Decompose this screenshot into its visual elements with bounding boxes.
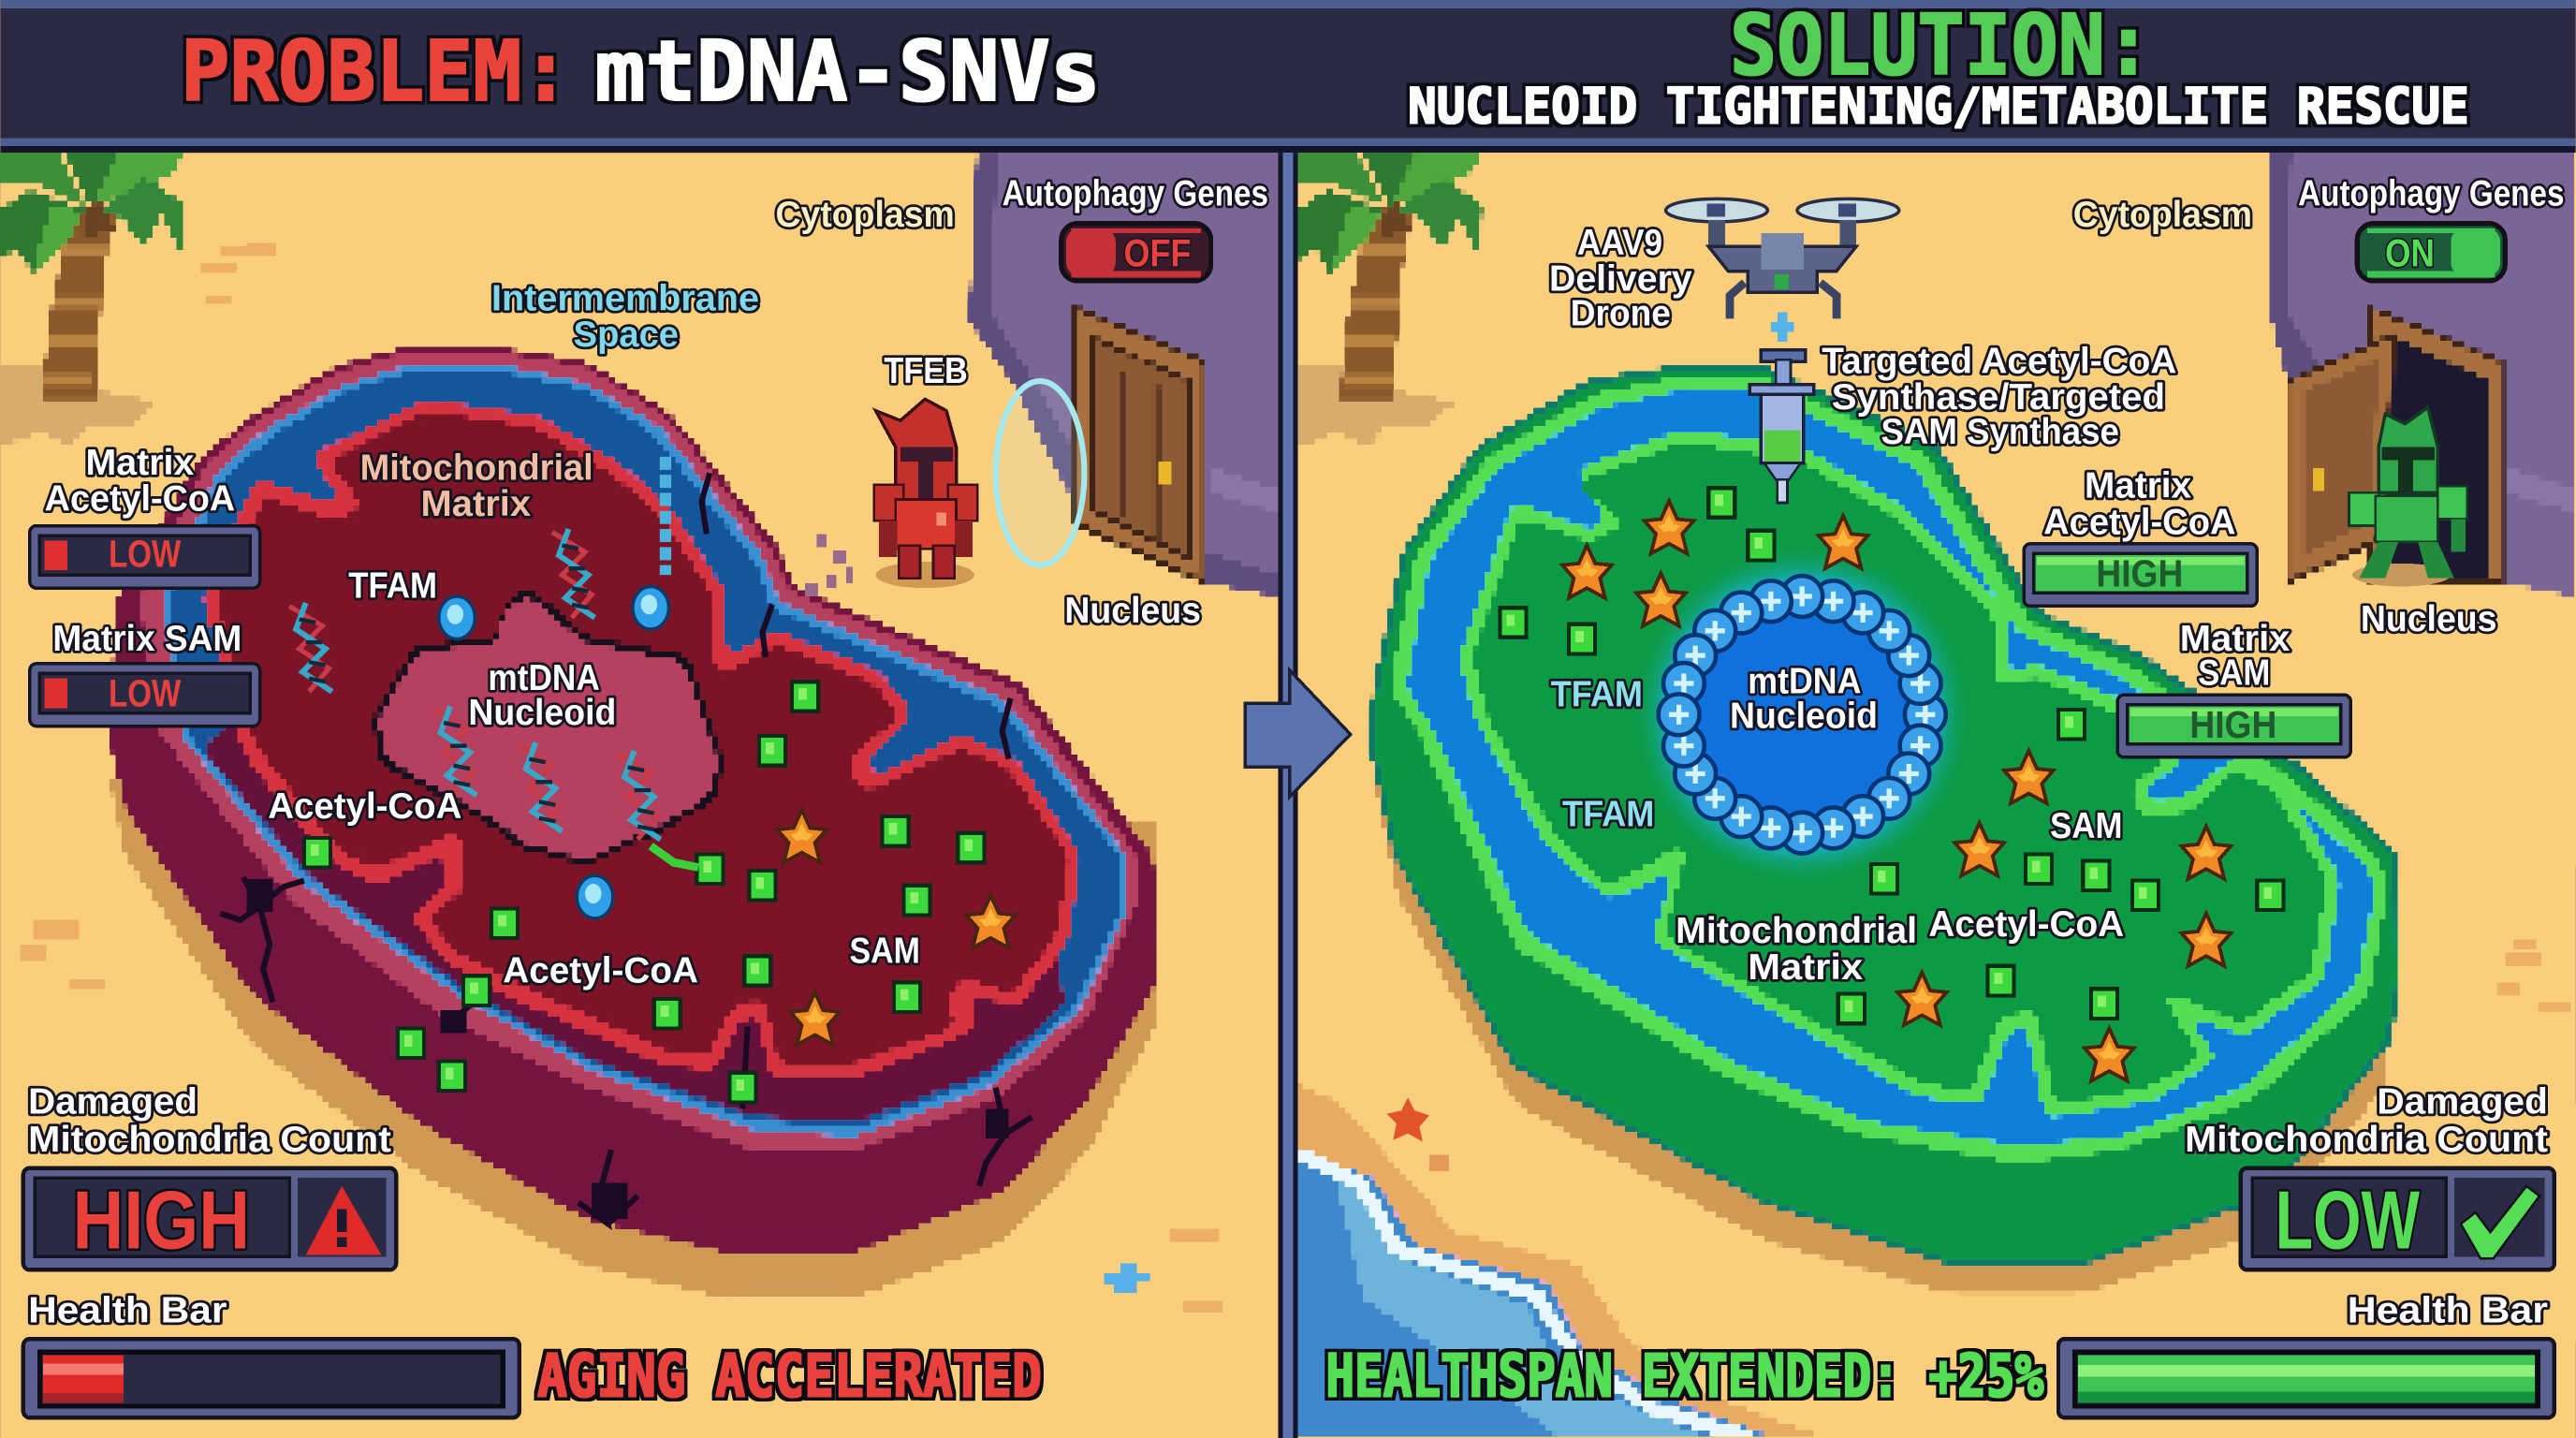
lower wall floor: [200, 723, 1064, 1123]
label: cytoplasm: Cytoplasm: [776, 195, 955, 235]
green knight TFEB: [2349, 407, 2467, 586]
green debris: [651, 846, 698, 867]
label: TFAM: TFAM: [348, 566, 437, 607]
mitochondrion shadow right: [1373, 772, 2393, 1293]
gauge: matrix SAM low: [30, 664, 260, 726]
nucleus door frame: [2369, 307, 2502, 581]
label: health bar right: Health Bar: [2348, 1291, 2548, 1331]
label: cytoplasm right: Cytoplasm: [2073, 195, 2252, 235]
label: AAV9 delivery drone: Delivery: [1549, 259, 1692, 300]
delivery drop: [1771, 312, 1793, 342]
label: mitochondrial matrix: [360, 448, 593, 524]
open door leaf: [2289, 335, 2393, 581]
health bar full: [2058, 1339, 2554, 1417]
label: mtDNA nucleoid: mtDNA: [488, 658, 600, 698]
sand marks: [20, 243, 1222, 1313]
label: mitochondrial matrix: Mitochondrial: [360, 448, 593, 488]
label: TFAM upper: TFAM: [1551, 675, 1643, 715]
gauge: matrix acetyl-CoA low: LOW: [109, 532, 182, 575]
bright rim: [1390, 378, 2385, 1164]
label: mtDNA nucleoid right: [1730, 661, 1878, 736]
label: matrix acetyl-CoA: [45, 443, 235, 520]
door knob right: [2313, 468, 2324, 492]
leaking cyan chain: [662, 457, 668, 575]
label: acetyl-CoA upper: Acetyl-CoA: [268, 786, 461, 827]
outer wall right: [1373, 372, 2395, 1260]
sand right: [1298, 153, 2576, 1438]
icon: warning triangle: [306, 1186, 381, 1255]
doorway dark: [2392, 335, 2490, 579]
label: matrix acetyl-CoA right: Acetyl-CoA: [2043, 502, 2235, 542]
label: TFAM lower: TFAM: [1562, 795, 1654, 835]
label: damaged mitochondria count right: Damaged: [2377, 1082, 2548, 1123]
nucleoid glow: [1630, 542, 1974, 888]
label: matrix acetyl-CoA right: [2043, 466, 2235, 542]
gauge: matrix acetyl-CoA high: [2024, 544, 2257, 606]
title: solution: NUCLEOID TIGHTENING/METABOLITE RESCUE: [1408, 79, 2469, 136]
label: mtDNA nucleoid: [468, 658, 616, 733]
title: problem: [181, 23, 1101, 121]
matrix outline right: [1458, 429, 2341, 1119]
toggle: off: OFF: [1124, 230, 1191, 274]
TFEB knight red: [874, 399, 977, 588]
mtDNA fragments: [289, 529, 661, 840]
palm tree right: [1298, 153, 1482, 447]
SAM stars: [777, 810, 1016, 1045]
gauge: matrix acetyl-CoA high: HIGH: [2096, 551, 2183, 594]
icon: check mark: [2461, 1186, 2539, 1258]
toggle: on: ON: [2385, 230, 2435, 274]
status: aging accelerated: AGING ACCELERATED: [537, 1342, 1042, 1411]
wall highlight: [1212, 468, 1278, 513]
label: intermembrane space: [491, 279, 759, 355]
matrix right: [1472, 442, 2328, 1106]
header bar: [0, 0, 2576, 153]
icon: AAV9 drone: [1666, 198, 1899, 318]
wet sand: [1298, 1084, 1823, 1438]
label: intermembrane space: Intermembrane: [491, 279, 759, 319]
intermembrane space: [168, 372, 1120, 1129]
sea water: [1298, 1150, 1774, 1438]
label: targeted synthases: Synthase/Targeted: [1832, 377, 2165, 418]
intermembrane space right: [1406, 391, 2372, 1145]
pixel art scenery right: [1297, 153, 2574, 1436]
gauge: matrix SAM high: [2117, 695, 2350, 757]
panel: solution: [1298, 153, 2576, 1438]
nucleoid blob: [378, 594, 718, 859]
gauge: matrix SAM low: LOW: [109, 672, 182, 715]
panel: problem: [0, 153, 1278, 1438]
acetyl-CoA cubes: [304, 682, 984, 1102]
label: AAV9 delivery drone: AAV9: [1577, 223, 1662, 263]
label: matrix acetyl-CoA: Matrix: [86, 443, 195, 483]
label: autophagy genes: Autophagy Genes: [1003, 173, 1268, 213]
label: damaged mitochondria count: Damaged: [28, 1082, 198, 1123]
label: damaged mitochondria count right: Mitochondria Count: [2185, 1120, 2548, 1160]
label: matrix SAM right: Matrix: [2180, 619, 2291, 659]
label: matrix SAM right: [2180, 619, 2291, 694]
matrix outline: [202, 400, 1081, 1078]
pink rim: [139, 353, 1137, 1150]
outer wall: [109, 348, 1158, 1254]
water splash: [1104, 1263, 1150, 1293]
SAM stars right: [1562, 501, 2231, 1081]
label: AAV9 delivery drone: Drone: [1571, 293, 1671, 333]
foam: [1298, 1153, 1749, 1438]
shallow water: [1334, 1170, 1708, 1438]
label: nucleus right: Nucleus: [2361, 599, 2496, 639]
sand marks right: [2496, 940, 2570, 1012]
pebble: [1429, 1155, 1449, 1171]
tfam gems: [439, 586, 668, 918]
label: targeted synthases: SAM Synthase: [1881, 412, 2119, 452]
arrow: problem to solution: [1245, 670, 1351, 797]
label: intermembrane space: Space: [574, 315, 679, 355]
pixel art scenery left: [0, 152, 1279, 1297]
counter: damaged low: [2241, 1168, 2554, 1269]
wall highlight right: [2510, 468, 2576, 513]
label: TFEB: TFEB: [884, 351, 968, 391]
counter: damaged high: HIGH: [73, 1175, 250, 1267]
label: targeted synthases: Targeted Acetyl-CoA: [1822, 341, 2176, 381]
IMS light edge: [161, 365, 1127, 1137]
compact nucleoid core: [1693, 606, 1910, 823]
center divider: [1278, 153, 1298, 1438]
gauge: matrix SAM high: HIGH: [2189, 703, 2276, 746]
gauge: matrix acetyl-CoA low: [30, 526, 260, 588]
label: mitochondrial matrix right: Matrix: [1748, 947, 1864, 988]
icon: syringe: [1749, 350, 1814, 503]
label: mtDNA nucleoid right: Nucleoid: [1730, 696, 1878, 736]
label: targeted synthases: [1822, 341, 2176, 452]
counter: damaged low: LOW: [2276, 1175, 2420, 1267]
label: acetyl-CoA right: Acetyl-CoA: [1928, 904, 2124, 945]
crack blobs: [247, 879, 1009, 1219]
outer wall right edge: [1368, 366, 2400, 1265]
label: damaged mitochondria count: Mitochondria Count: [28, 1120, 391, 1160]
label: mitochondrial matrix right: Mitochondrial: [1676, 911, 1917, 951]
label: mtDNA nucleoid: Nucleoid: [468, 693, 616, 733]
label: mtDNA nucleoid right: mtDNA: [1748, 661, 1861, 701]
nucleoid blob outline: [372, 585, 724, 866]
TFAM bead ring: [1659, 576, 1946, 854]
label: damaged mitochondria count: [28, 1082, 391, 1160]
label: mitochondrial matrix right: [1676, 911, 1917, 988]
door leaf panel: [2303, 359, 2378, 555]
title: problem: PROBLEM:: [181, 23, 570, 121]
label: AAV9 delivery drone: [1549, 223, 1692, 333]
door knob: [1158, 462, 1171, 485]
cracks: [220, 473, 1032, 1224]
debris particles: [805, 534, 853, 596]
label: SAM right: SAM: [2050, 806, 2122, 846]
label: nucleus: Nucleus: [1064, 591, 1201, 631]
palm tree: [0, 153, 184, 447]
label: mitochondrial matrix: Matrix: [421, 484, 532, 524]
matrix: [215, 411, 1070, 1064]
title: solution: [1408, 0, 2469, 136]
starfish: [1386, 1097, 1429, 1142]
status: healthspan extended: HEALTHSPAN EXTENDED: +25%: [1325, 1342, 2043, 1411]
autophagy barrier bubble: [996, 381, 1084, 565]
label: damaged mitochondria count right: [2185, 1082, 2548, 1160]
title: solution: SOLUTION:: [1730, 0, 2152, 95]
health bar low: [23, 1339, 520, 1417]
nucleus wall right: [2272, 153, 2576, 596]
nucleus wall: [970, 153, 1278, 596]
label: matrix acetyl-CoA: Acetyl-CoA: [45, 479, 235, 520]
acetyl-CoA cubes right: [1500, 488, 2283, 1023]
counter: damaged high: [23, 1168, 396, 1269]
title: problem: mtDNA-SNVs: [595, 23, 1101, 121]
nucleus door closed: [1075, 307, 1205, 581]
sand left: [0, 153, 1278, 1438]
label: SAM: SAM: [849, 931, 920, 971]
toggle: on: [2357, 224, 2505, 281]
toggle: off: [1061, 224, 1211, 281]
label: acetyl-CoA lower: Acetyl-CoA: [503, 950, 698, 990]
damaged mitochondrion contents: [220, 457, 1032, 1224]
wall edge: [970, 153, 1278, 596]
label: matrix acetyl-CoA right: Matrix: [2085, 466, 2192, 506]
wall edge right: [2272, 153, 2329, 381]
label: health bar: Health Bar: [28, 1291, 227, 1331]
label: matrix SAM right: SAM: [2198, 653, 2270, 694]
mitochondrion shadow: [109, 772, 1158, 1298]
label: matrix SAM: Matrix SAM: [52, 619, 242, 659]
